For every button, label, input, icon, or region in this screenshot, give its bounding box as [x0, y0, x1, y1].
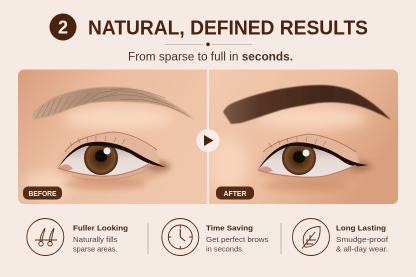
- panel: before photo: [18, 70, 207, 204]
- feature text: Naturally fills: [73, 235, 118, 244]
- feature text: Get perfect brows: [206, 235, 269, 244]
- upper lash line: [58, 142, 166, 168]
- infographic canvas: [18, 14, 398, 256]
- icon: hair follicles: [27, 218, 64, 256]
- icon: play button: [196, 129, 220, 152]
- feature text: Time Saving: [206, 224, 253, 232]
- lower lid: [258, 165, 356, 177]
- eye socket shadow: [58, 158, 170, 184]
- eyelid: [60, 132, 160, 168]
- step number badge: 2: [58, 18, 68, 38]
- before label: [23, 186, 62, 200]
- before eye: [58, 132, 166, 180]
- feature text: & all-day wear.: [336, 244, 388, 254]
- feature text: [206, 224, 269, 254]
- feature text: Long Lasting: [336, 224, 386, 232]
- step number badge: [50, 14, 76, 40]
- upper lash line: [258, 142, 368, 170]
- lower lid: [58, 163, 150, 176]
- feature: long lasting: [292, 218, 388, 256]
- title ornament: [165, 42, 252, 46]
- eye socket shadow: [259, 161, 361, 183]
- icon: leaf: [292, 218, 330, 256]
- divider between photos: [207, 70, 209, 204]
- after label: [216, 186, 254, 200]
- feature: time saving: [162, 218, 269, 256]
- before label: BEFORE: [28, 191, 57, 198]
- after label: AFTER: [224, 191, 246, 198]
- panel: after photo: [208, 70, 398, 204]
- sparse eyebrow: [32, 87, 195, 120]
- title: NATURAL, DEFINED RESULTS: [88, 16, 368, 40]
- eyelid: [264, 135, 360, 166]
- feature text: in seconds.: [206, 244, 244, 254]
- feature: fuller looking: [27, 218, 128, 256]
- defined eyebrow: [223, 85, 391, 124]
- feature text: Smudge-proof: [336, 235, 388, 244]
- subtitle: From sparse to full in seconds.: [128, 52, 293, 64]
- feature text: sparse areas.: [73, 244, 118, 254]
- after eye: [258, 134, 368, 177]
- feature text: [73, 224, 128, 254]
- heading: [50, 14, 368, 64]
- icon: clock: [162, 218, 199, 256]
- feature text: [336, 224, 388, 254]
- feature text: Fuller Looking: [73, 224, 128, 232]
